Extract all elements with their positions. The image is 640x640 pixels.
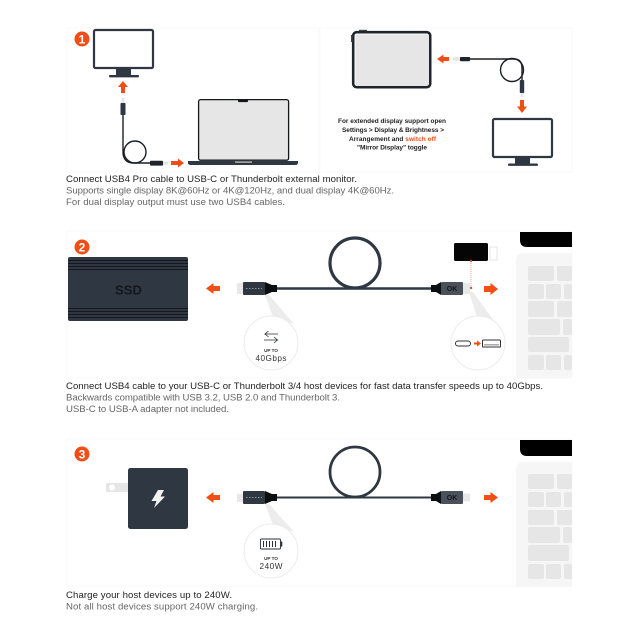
cable: braided with coil — [237, 238, 470, 295]
callout: 40Gbps speed: 40Gbps — [256, 354, 286, 363]
icon: tablet — [351, 30, 430, 87]
icon: laptop — [188, 100, 298, 165]
cable: charging with coil — [237, 447, 470, 504]
text: step 2 description: USB-C to USB-A adapter not included. — [66, 404, 229, 415]
text: step 2 description: Connect USB4 cable to your USB-C or Thunderbolt 3/4 host devices for fast data transfer speeds up to 40Gbps. — [66, 381, 543, 392]
arrow: left to charger — [206, 492, 220, 503]
arrow: left to SSD — [206, 283, 220, 294]
text: step 1 description: Connect USB4 Pro cable to USB-C or Thunderbolt external monitor. — [66, 174, 357, 185]
arrow: right to laptop — [484, 492, 498, 503]
text: step 1 description: For dual display output must use two USB4 cables. — [66, 197, 285, 208]
callout: USB-C to USB-A adapter — [451, 292, 505, 370]
icon: SSD — [68, 257, 188, 321]
icon: USB adapter dongle — [454, 243, 497, 289]
icon: external monitor — [493, 119, 552, 166]
callout: 240W charging — [244, 504, 298, 578]
arrow: down to monitor — [517, 100, 527, 113]
text: step 1 description: Supports single display 8K@60Hz or 4K@120Hz, and dual display 4K@60Hz. — [66, 186, 394, 196]
panel: step 1 monitor and laptop connection — [67, 28, 319, 172]
icon: wall charger — [106, 468, 188, 529]
text: step 2 description — [66, 381, 543, 415]
cable: USB4 Pro with coil — [120, 98, 168, 166]
illustration: laptop keyboard — [516, 232, 572, 378]
text: extended display note — [338, 118, 446, 152]
text: extended display note: For extended display support open — [338, 118, 446, 125]
panel: step 1 iPad extended display — [320, 28, 572, 172]
text: extended display note: Settings > Display & Brightness > — [342, 127, 444, 134]
arrow: right to laptop — [171, 158, 184, 168]
callout: 240W charging: UP TO — [264, 556, 278, 561]
text: step 1 description — [66, 174, 394, 208]
callout: 40Gbps speed: UP TO — [264, 348, 278, 353]
step badge 3 — [74, 446, 90, 462]
arrow: right to laptop — [484, 283, 498, 295]
step badge 1 — [74, 32, 90, 46]
step badge 1: 1 — [79, 32, 86, 46]
callout: 240W charging: 240W — [260, 562, 283, 571]
text: step 3 description: Not all host devices support 240W charging. — [66, 602, 258, 612]
cable: tablet to monitor with coil — [453, 57, 524, 97]
panel: step 2 data transfer — [67, 231, 572, 378]
text: step 2 description: Backwards compatible with USB 3.2, USB 2.0 and Thunderbolt 3. — [66, 392, 340, 404]
icon: SSD: SSD — [115, 282, 142, 298]
illustration: laptop keyboard — [516, 440, 572, 587]
callout: 40Gbps speed — [244, 295, 298, 370]
text: extended display note: "Mirror Display" toggle — [357, 144, 427, 152]
text: extended display note: Arrangement and switch off — [349, 136, 437, 143]
arrow: left to tablet — [437, 54, 449, 64]
step badge 2 — [74, 240, 90, 254]
text: step 3 description: Charge your host devices up to 240W. — [66, 590, 232, 601]
icon: external monitor — [94, 30, 153, 77]
cable: charging with coil: OK — [447, 495, 457, 502]
text: step 3 description — [66, 590, 258, 612]
arrow: up to monitor — [118, 81, 128, 93]
panel: step 3 charging — [67, 439, 572, 587]
cable: braided with coil: OK — [447, 286, 457, 293]
step badge 2: 2 — [79, 240, 86, 254]
step badge 3: 3 — [79, 448, 86, 462]
